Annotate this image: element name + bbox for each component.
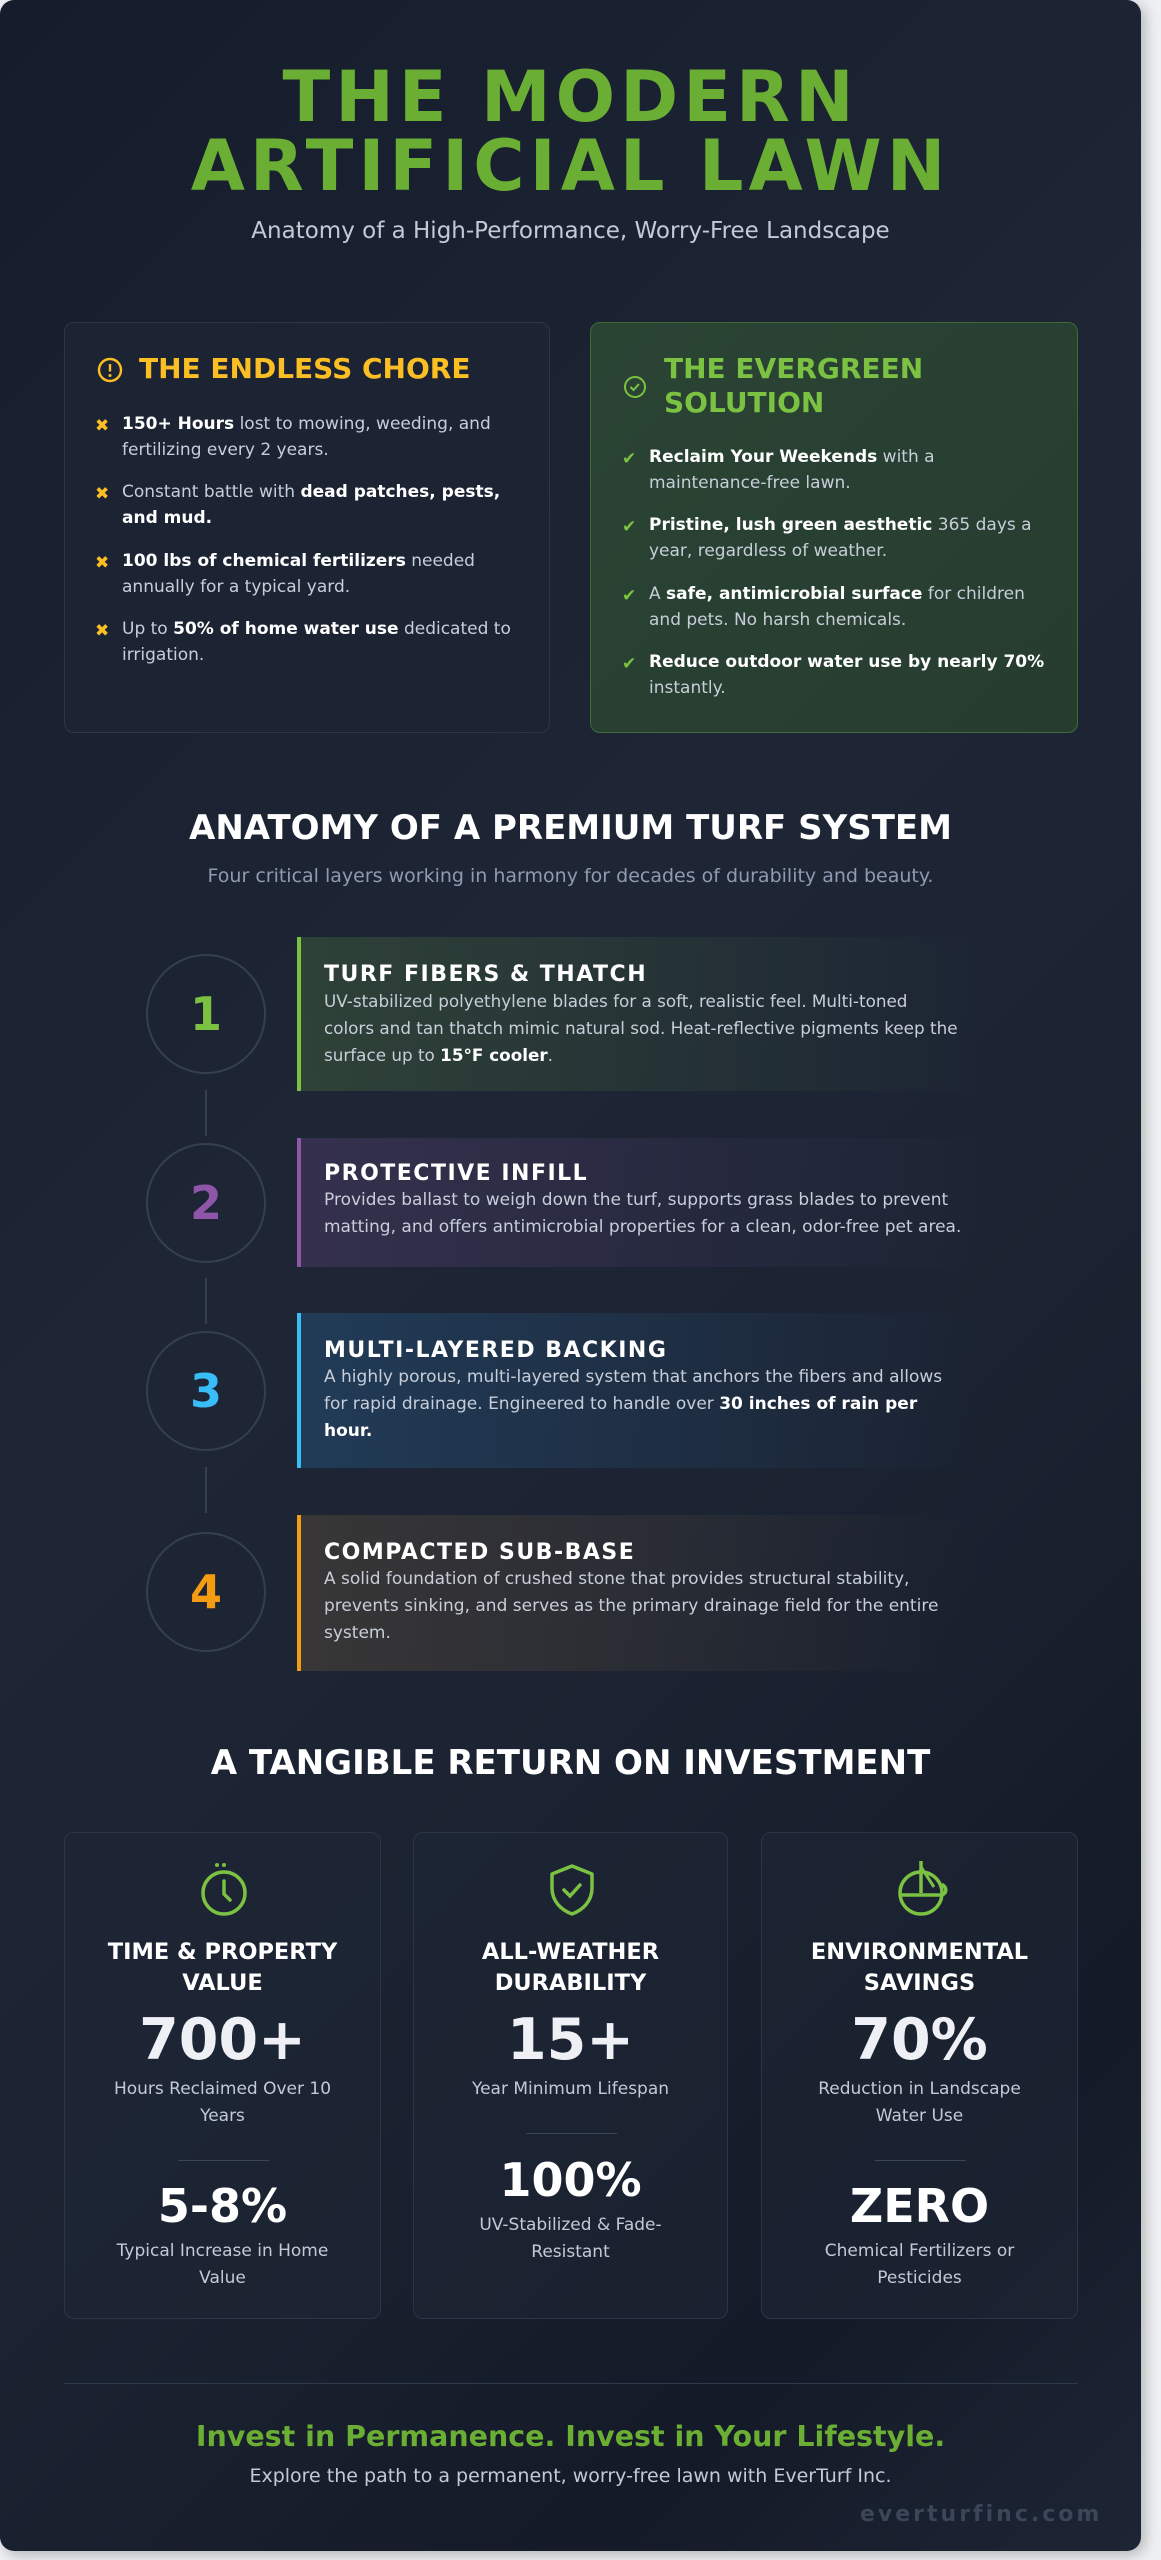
roi card: time & property: 700+ <box>139 2007 306 2073</box>
layer 1 number <box>146 954 266 1074</box>
layer 1 number: 1 <box>190 987 222 1041</box>
watermark: everturfinc.com <box>860 2502 1102 2527</box>
bullets: Reclaim Your Weekends with a maintenance-free lawn. <box>649 447 935 493</box>
bullets: ✖ <box>95 621 109 641</box>
layer 4 number: 4 <box>190 1565 222 1619</box>
layer 2 number: 2 <box>190 1176 222 1230</box>
icon: warning <box>98 358 122 382</box>
bullets: 150+ Hours lost to mowing, weeding, and fertilizing every 2 years. <box>122 414 491 460</box>
layer 3 number: 3 <box>190 1364 222 1418</box>
layer 2 number <box>146 1143 266 1263</box>
layer 1 card <box>297 937 980 1091</box>
heading: anatomy: ANATOMY OF A PREMIUM TURF SYSTEM <box>189 808 952 848</box>
footer tagline: Invest in Permanence. Invest in Your Lifestyle. <box>196 2420 945 2453</box>
roi card: environmental: ZERO <box>850 2179 989 2233</box>
heading: THE EVERGREEN <box>664 352 923 385</box>
roi card: time & property: Hours Reclaimed Over 10 Years <box>114 2079 331 2126</box>
heading: SOLUTION <box>664 386 824 419</box>
layer 3 card: MULTI-LAYERED BACKING <box>324 1338 667 1363</box>
title: ARTIFICIAL LAWN <box>191 125 950 207</box>
bullets <box>622 447 1044 698</box>
roi card: time & property: 5-8% <box>158 2179 287 2233</box>
layer 4 card <box>297 1515 980 1671</box>
bullets: Pristine, lush green aesthetic 365 days a year, regardless of weather. <box>649 515 1032 561</box>
anatomy subtitle: Four critical layers working in harmony for decades of durability and beauty. <box>208 865 933 887</box>
bullets: ✔ <box>622 517 636 537</box>
bullets: Constant battle with dead patches, pests, and mud. <box>122 482 500 528</box>
roi card: environmental: ENVIRONMENTAL <box>811 1939 1028 1965</box>
layer 3 card <box>297 1313 980 1468</box>
layer 3 number <box>146 1331 266 1451</box>
roi card: durability: Year Minimum Lifespan <box>472 2079 669 2099</box>
icon: check circle <box>624 376 646 398</box>
panel: evergreen solution <box>590 322 1078 733</box>
layer 2 card <box>297 1138 980 1267</box>
roi card: durability: DURABILITY <box>495 1970 646 1996</box>
roi card: durability <box>413 1832 728 2319</box>
title: THE MODERN <box>282 56 859 138</box>
roi card: durability: UV-Stabilized & Fade-Resistant <box>479 2215 662 2262</box>
subtitle: Anatomy of a High-Performance, Worry-Free Landscape <box>251 218 890 244</box>
roi card: environmental: SAVINGS <box>864 1970 975 1996</box>
roi card: environmental <box>761 1832 1078 2319</box>
layer 2 card: PROTECTIVE INFILL <box>324 1161 588 1186</box>
roi card: durability: 15+ <box>507 2007 634 2073</box>
bullets: Reduce outdoor water use by nearly 70% instantly. <box>649 652 1044 698</box>
bullets: ✔ <box>622 654 636 674</box>
layer 3 card: A highly porous, multi-layered system that anchors the fibers and allows for rapid drainage. Engineered to handle over 30 inches of rain per hour. <box>324 1367 942 1441</box>
bullets: Up to 50% of home water use dedicated to irrigation. <box>122 619 511 665</box>
connector lines <box>205 1090 207 1136</box>
roi card: time & property: Typical Increase in Home Value <box>117 2241 328 2288</box>
layer 1 card: TURF FIBERS & THATCH <box>324 962 647 987</box>
roi card: environmental: Reduction in Landscape Water Use <box>818 2079 1021 2126</box>
bullets: ✖ <box>95 416 109 436</box>
roi card: environmental: 70% <box>851 2007 988 2073</box>
panel: endless chore <box>64 322 550 733</box>
roi card: time & property <box>64 1832 381 2319</box>
layer 4 card: A solid foundation of crushed stone that provides structural stability, prevents sinking, and serves as the primary drainage field for the entire system. <box>324 1569 938 1643</box>
roi card: durability: ALL-WEATHER <box>482 1939 659 1965</box>
heading: ROI: A TANGIBLE RETURN ON INVESTMENT <box>211 1743 930 1783</box>
roi card: environmental: Chemical Fertilizers or Pesticides <box>825 2241 1014 2288</box>
icon: stopwatch <box>201 1863 247 1916</box>
bullets: ✖ <box>95 484 109 504</box>
roi card: time & property: TIME & PROPERTY <box>108 1939 337 1965</box>
bullets: ✖ <box>95 553 109 573</box>
bullets: ✔ <box>622 586 636 606</box>
bullets: ✔ <box>622 449 636 469</box>
icon: leaf/eco <box>898 1861 948 1916</box>
heading: THE ENDLESS CHORE <box>139 352 470 385</box>
bullets: A safe, antimicrobial surface for children and pets. No harsh chemicals. <box>649 584 1025 630</box>
layer 1 card: colors and tan thatch mimic natural sod. Heat-reflective pigments keep the surface up to 15°F cooler. <box>324 1018 958 1065</box>
heading <box>664 352 923 419</box>
roi card: durability: 100% <box>499 2153 642 2207</box>
title <box>191 56 950 207</box>
layer 4 card: COMPACTED SUB-BASE <box>324 1540 635 1565</box>
icon: shield <box>550 1864 594 1916</box>
bullets <box>95 414 511 665</box>
layer 1 card: UV-stabilized polyethylene blades for a soft, realistic feel. Multi-toned <box>324 991 907 1011</box>
layer 2 card: Provides ballast to weigh down the turf, supports grass blades to prevent matting, and offers antimicrobial properties for a clean, odor-free pet area. <box>324 1190 961 1237</box>
roi card: time & property: VALUE <box>182 1970 263 1996</box>
bullets: 100 lbs of chemical fertilizers needed annually for a typical yard. <box>122 551 475 597</box>
layer 4 number <box>146 1532 266 1652</box>
footer subtext: Explore the path to a permanent, worry-free lawn with EverTurf Inc. <box>249 2465 892 2487</box>
